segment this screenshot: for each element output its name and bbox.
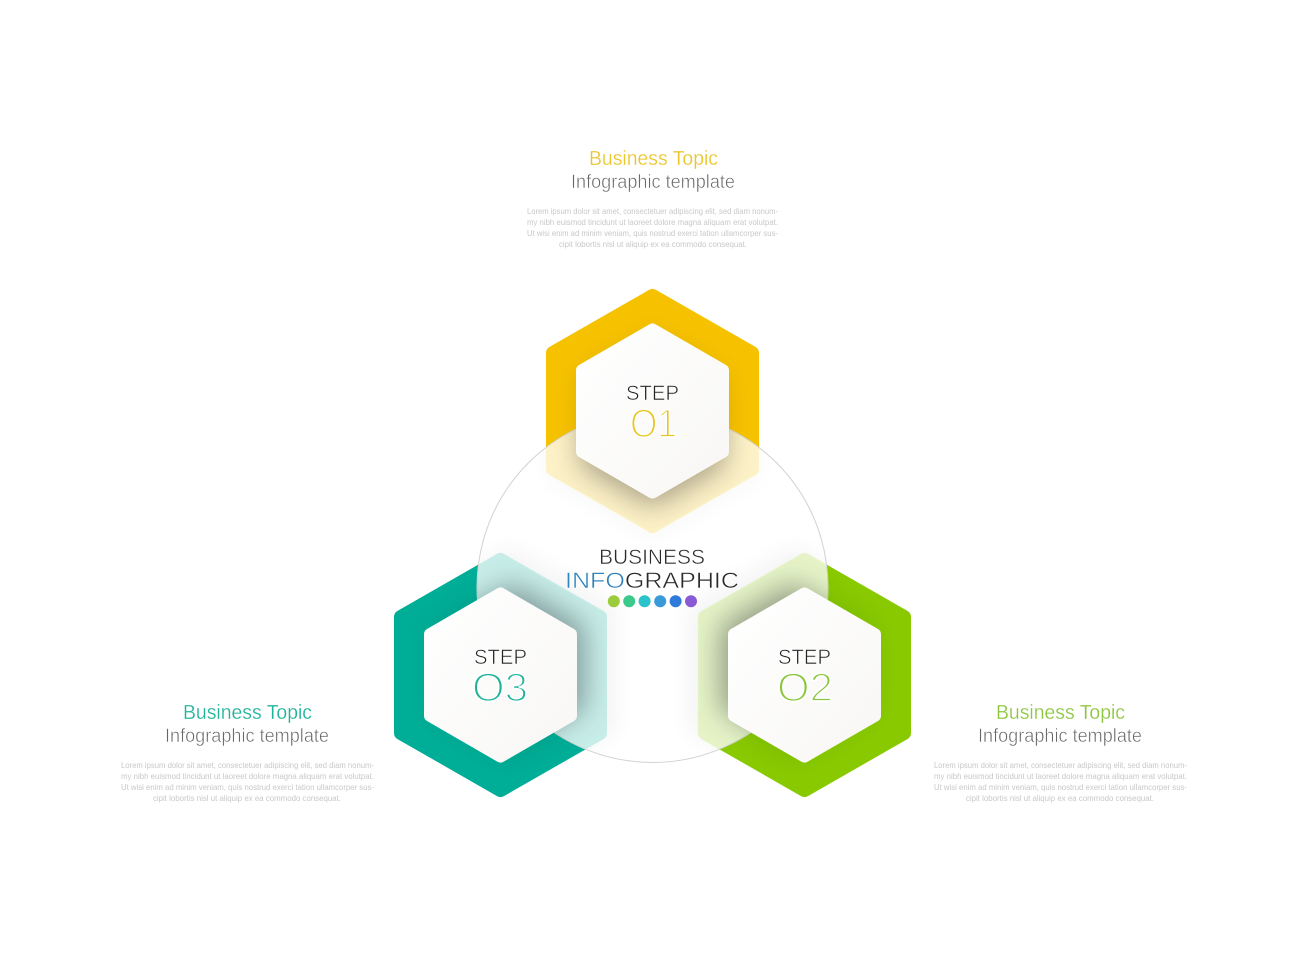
text block: step 02 topic: Lorem ipsum dolor sit amet, consectetuer adipiscing elit, sed diam nonum- (934, 760, 1187, 770)
centre heading: business infographic (565, 546, 739, 593)
text block: step 02 topic: cipit lobortis nisl ut aliquip ex ea commodo consequat. (966, 793, 1154, 803)
hexagon ring: step 02 green (705, 560, 904, 790)
inner shadows falling on the coloured rings (460, 380, 861, 752)
label: step 01 (626, 382, 679, 446)
text block: step 02 topic: Business Topic (996, 701, 1125, 724)
centre heading: business infographic: BUSINESS (599, 546, 705, 569)
text block: step 01 topic: Ut wisi enim ad minim veniam, quis nostrud exerci tation ullamcorper sus- (527, 228, 778, 238)
text block: step 03 topic: cipit lobortis nisl ut aliquip ex ea commodo consequat. (153, 793, 341, 803)
text block: step 01 topic: my nibh euismod tincidunt ut laoreet dolore magna aliquam erat volutpat. (527, 217, 778, 227)
text block: step 01 topic: Business Topic (589, 147, 718, 170)
text block: step 02 topic (934, 701, 1187, 803)
text block: step 01 topic: cipit lobortis nisl ut aliquip ex ea commodo consequat. (559, 239, 747, 249)
text block: step 01 topic (527, 147, 778, 249)
panel: step 03 white hexagon (430, 593, 571, 757)
panel: step 02 white hexagon (734, 593, 875, 757)
label: step 03: O3 (472, 666, 528, 710)
text block: step 01 topic: Lorem ipsum dolor sit amet, consectetuer adipiscing elit, sed diam nonum- (527, 206, 778, 216)
soft shadows of the rings on the centre circle (517, 560, 790, 716)
label: step 02: O2 (777, 666, 833, 710)
label: step 03 (472, 646, 528, 710)
text block: step 03 topic: Ut wisi enim ad minim veniam, quis nostrud exerci tation ullamcorper sus- (121, 782, 374, 792)
text block: step 02 topic: my nibh euismod tincidunt ut laoreet dolore magna aliquam erat volutpat. (934, 771, 1187, 781)
text block: step 03 topic: Lorem ipsum dolor sit amet, consectetuer adipiscing elit, sed diam nonum- (121, 760, 374, 770)
label: step 01: O1 (630, 402, 677, 446)
panel: step 01 white hexagon (582, 329, 723, 493)
centre circle: translucent white with thin outline (477, 412, 828, 762)
label: step 03: STEP (474, 646, 527, 669)
text block: step 01 topic: Infographic template (571, 172, 735, 193)
label: step 02: STEP (778, 646, 831, 669)
text block: step 02 topic: Ut wisi enim ad minim veniam, quis nostrud exerci tation ullamcorper sus- (934, 782, 1187, 792)
text block: step 03 topic: my nibh euismod tincidunt ut laoreet dolore magna aliquam erat volutpat. (121, 771, 374, 781)
text block: step 02 topic: Infographic template (978, 726, 1142, 747)
text block: step 03 topic: Business Topic (183, 701, 312, 724)
inner hexagon shadows over the frosted circle (477, 429, 828, 738)
centre heading: business infographic: INFO GRAPHIC (565, 568, 739, 593)
label: step 01: STEP (626, 382, 679, 405)
text block: step 03 topic (121, 701, 374, 803)
colour dots row (608, 595, 697, 607)
label: step 02 (777, 646, 833, 710)
text block: step 03 topic: Infographic template (165, 726, 329, 747)
hexagon ring: step 01 yellow (553, 296, 752, 526)
hexagon ring: step 03 teal (401, 560, 600, 790)
